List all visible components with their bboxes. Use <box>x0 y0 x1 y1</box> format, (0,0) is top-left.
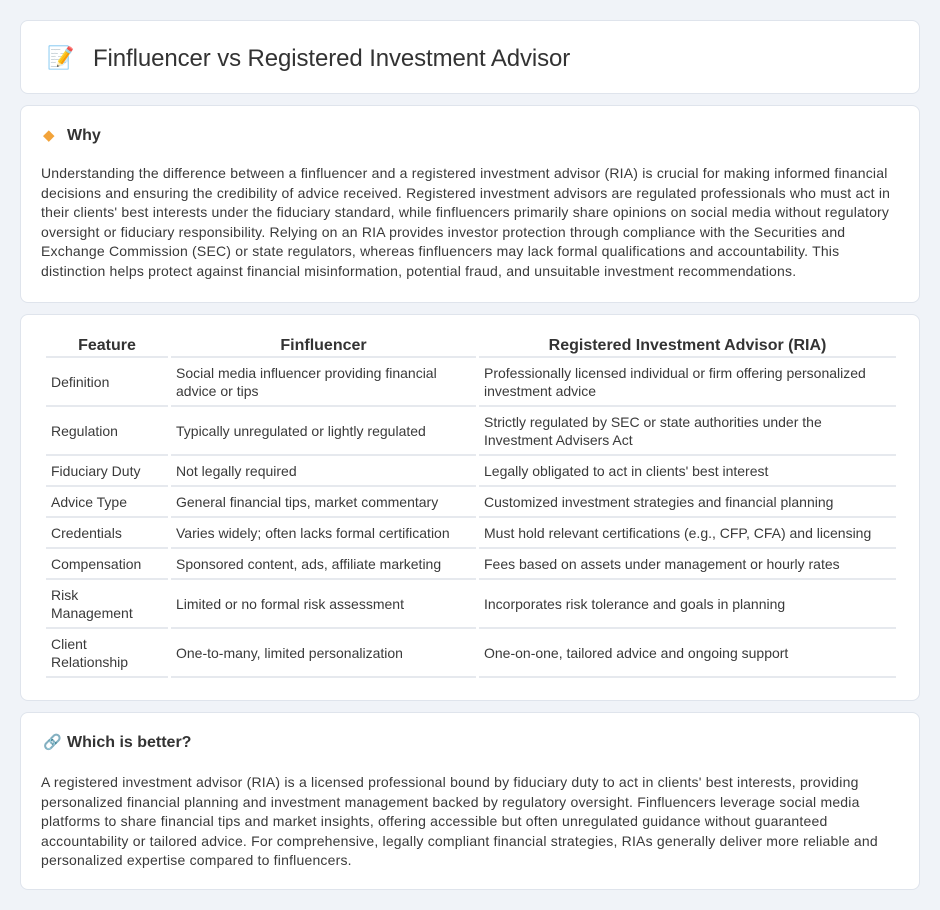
table: Social media influencer providing financial advice or tips <box>176 365 437 399</box>
table: Must hold relevant certifications (e.g., CFP, CFA) and licensing <box>484 525 871 541</box>
table: Client <box>51 636 87 652</box>
table: Limited or no formal risk assessment <box>176 596 404 612</box>
text block: which is better: platforms to share financial tips and market insights, offering accessible but often unregulated guidance without guaranteed <box>41 813 827 829</box>
text block: which is better: personalized financial planning and investment management backed by regulatory oversight. Finfluencers leverage social media <box>41 794 860 810</box>
text block: which is better: A registered investment advisor (RIA) is a licensed professional bound by fiduciary duty to act in clients' best interests, providing <box>41 774 859 790</box>
text block: which is better: personalized expertise compared to finfluencers. <box>41 852 352 868</box>
table: Sponsored content, ads, affiliate marketing <box>176 556 441 572</box>
table: One-on-one, tailored advice and ongoing support <box>484 645 788 661</box>
table: Registered Investment Advisor (RIA) <box>549 337 826 354</box>
table: Incorporates risk tolerance and goals in planning <box>484 596 785 612</box>
table: Credentials <box>51 525 122 541</box>
icon: link: 🔗 <box>43 734 62 751</box>
table: Strictly regulated by SEC or state authorities under the Investment Advisers Act <box>484 414 822 448</box>
table: Customized investment strategies and financial planning <box>484 494 833 510</box>
table: Legally obligated to act in clients' best interest <box>484 463 768 479</box>
text block: why: Exchange Commission (SEC) or state regulators, whereas finfluencers may lack formal qualifications and accountability. This <box>41 243 839 259</box>
panel: comparison table <box>20 314 920 701</box>
table: One-to-many, limited personalization <box>176 645 403 661</box>
table: Fees based on assets under management or hourly rates <box>484 556 840 572</box>
table: General financial tips, market commentary <box>176 494 438 510</box>
text block: why: oversight or fiduciary responsibility. Relying on an RIA provides investor protection through compliance with the Securities and <box>41 224 845 240</box>
text block: why: Understanding the difference between a finfluencer and a registered investment advisor (RIA) is crucial for making informed financial <box>41 165 888 181</box>
icon: diamond: ◆ <box>43 127 55 144</box>
table: Finfluencer <box>280 337 367 354</box>
panel: why <box>20 105 920 303</box>
table: Varies widely; often lacks formal certification <box>176 525 450 541</box>
table: Management <box>51 605 133 621</box>
text block: why: decisions and ensuring the credibility of advice received. Registered investment advisors are regulated professionals who must act in <box>41 184 890 200</box>
text block: why: distinction helps protect against financial misinformation, potential fraud, and unsuitable investment recommendations. <box>41 262 796 278</box>
text block: which is better: accountability or tailored advice. For comprehensive, legally compliant financial strategies, RIAs generally deliver more reliable and <box>41 832 878 848</box>
table: Risk <box>51 587 78 603</box>
heading: which is better: Which is better? <box>67 734 191 751</box>
table: Typically unregulated or lightly regulated <box>176 423 426 439</box>
table: Regulation <box>51 423 118 439</box>
table: Fiduciary Duty <box>51 463 140 479</box>
table: Advice Type <box>51 494 127 510</box>
panel: which is better <box>20 712 920 890</box>
table: Definition <box>51 374 109 390</box>
title: Finfluencer vs Registered Investment Advisor <box>93 45 570 72</box>
table: Not legally required <box>176 463 297 479</box>
icon: document with pencil: 📝 <box>47 45 74 70</box>
table: Compensation <box>51 556 141 572</box>
text block: why <box>41 165 890 279</box>
table: Feature <box>78 337 136 354</box>
table: Relationship <box>51 654 128 670</box>
table <box>46 337 896 678</box>
text block: why: their clients' best interests under the fiduciary standard, while finfluencers primarily share opinions on social media without regulatory <box>41 204 889 220</box>
table: Professionally licensed individual or firm offering personalized investment advice <box>484 365 866 399</box>
text block: which is better <box>41 774 878 868</box>
heading: why: Why <box>67 127 101 144</box>
panel: title <box>20 20 920 94</box>
